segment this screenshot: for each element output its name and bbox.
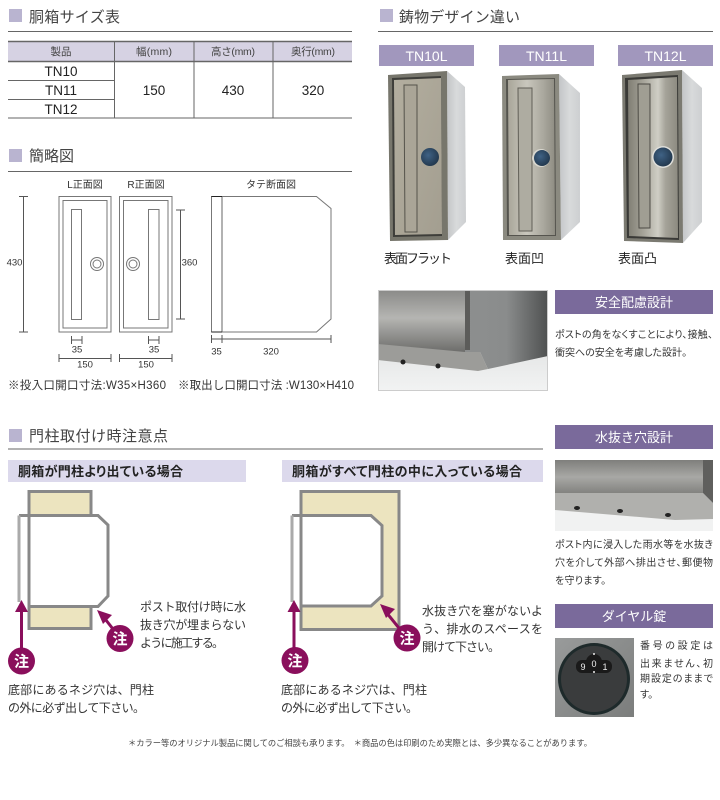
text: drain hole note: 抜き穴が埋まらない xyxy=(140,617,246,632)
size table: 320 xyxy=(302,83,324,98)
heading: schematic xyxy=(8,147,352,172)
text: dial lock description xyxy=(639,640,713,701)
banner: dial lock: ダイヤル錠 xyxy=(602,609,666,624)
text: drain space note: 水抜き穴を塞がないよ xyxy=(422,603,543,618)
dimension: 360 slot height: 360 xyxy=(182,258,197,268)
size table: 奥行(mm) xyxy=(291,45,335,58)
arrow: drain space: 注 xyxy=(399,630,415,648)
product: TN10L flat: 表面フラット xyxy=(384,251,452,266)
text: drain space note: う、排水のスペースを xyxy=(422,622,543,636)
size table xyxy=(8,41,352,118)
banner: drain hole design: 水抜き穴設計 xyxy=(595,430,673,445)
schematic: L front view xyxy=(59,179,111,370)
schematic: vertical section: 35 xyxy=(211,346,222,358)
text: screw hole note: の外に必ず出して下さい。 xyxy=(8,701,145,715)
banner: safety design xyxy=(555,290,713,314)
text: screw hole note xyxy=(281,683,427,715)
heading: schematic: 簡略図 xyxy=(29,147,74,165)
panel: box fully inside gatepost xyxy=(281,460,543,715)
product: TN11L concave: TN11L xyxy=(526,48,567,64)
text: drain description: ポスト内に浸入した雨水等を水抜き xyxy=(555,538,713,551)
photo: rounded corner xyxy=(378,290,548,391)
schematic: R front view xyxy=(120,179,172,370)
text: drain space note xyxy=(422,603,543,654)
arrow: drain space xyxy=(380,604,420,652)
dimension: 360 slot height xyxy=(176,210,197,319)
subheading xyxy=(282,460,543,482)
heading: casting design: 鋳物デザイン違い xyxy=(399,8,520,26)
product: TN12L convex xyxy=(618,45,713,266)
footer note: ＊カラー等のオリジナル製品に関してのご相談も承ります。 ＊商品の色は印刷のため実際とは、多少異なることがあります。 xyxy=(128,738,592,748)
diagram xyxy=(292,492,399,630)
text: safety description xyxy=(555,328,713,359)
size table: 高さ(mm) xyxy=(211,45,255,58)
text: drain space note: 開けて下さい。 xyxy=(422,640,500,654)
size table: 製品 xyxy=(50,45,72,58)
note: opening sizes xyxy=(8,378,354,392)
banner: drain hole design xyxy=(555,425,713,449)
banner: dial lock xyxy=(555,604,713,628)
arrow: drain holes xyxy=(97,610,134,652)
product: TN10L flat: TN10L xyxy=(405,48,448,64)
photo: dial lock: 0 xyxy=(591,659,597,669)
heading: gatepost mounting: 門柱取付け時注意点 xyxy=(29,428,168,445)
text: screw hole note xyxy=(8,683,154,715)
schematic: R front view: 150 xyxy=(138,360,154,370)
dimension: 430 height: 430 xyxy=(7,258,22,268)
arrow: screw holes xyxy=(8,600,35,674)
diagram xyxy=(19,492,108,628)
size table: 150 xyxy=(143,83,165,98)
size table: TN11 xyxy=(45,83,77,98)
text: dial lock description: 出来ません、初 xyxy=(640,657,713,670)
photo: dial lock: 1 xyxy=(602,662,608,672)
heading: size table xyxy=(8,9,352,32)
subheading xyxy=(8,460,246,482)
arrow: screw holes xyxy=(282,600,308,674)
photo: drain holes xyxy=(555,460,713,531)
heading: casting design xyxy=(378,8,713,32)
text: safety description: ポストの角をなくすことにより、接触、 xyxy=(555,328,713,341)
text: screw hole note: 底部にあるネジ穴は、門柱 xyxy=(281,683,427,697)
text: dial lock description: す。 xyxy=(639,689,653,701)
text: safety description: 衝突への安全を考慮した設計。 xyxy=(555,346,687,359)
text: drain hole note: ポスト取付け時に水 xyxy=(140,600,246,614)
text: screw hole note: 底部にあるネジ穴は、門柱 xyxy=(8,683,154,697)
size table: TN10 xyxy=(44,64,78,79)
text: dial lock description: 番号の設定は xyxy=(640,640,713,652)
product: TN11L concave xyxy=(499,45,594,266)
dimension: 430 height xyxy=(7,196,28,332)
banner: safety design: 安全配慮設計 xyxy=(595,295,673,310)
schematic: R front view: R正面図 xyxy=(127,179,165,191)
arrow: drain holes: 注 xyxy=(112,630,128,648)
schematic: L front view: 150 xyxy=(77,360,93,370)
photo: dial lock: 9 xyxy=(580,662,586,672)
size table: TN12 xyxy=(44,102,78,117)
schematic: vertical section xyxy=(211,179,331,358)
text: dial lock description: 期設定のままで xyxy=(640,673,713,685)
text: drain description: を守ります。 xyxy=(555,575,606,587)
note: opening sizes: ※取出し口開口寸法 :W130×H410 xyxy=(178,378,354,392)
subheading: 胴箱が門柱より出ている場合 xyxy=(18,464,183,479)
note: opening sizes: ※投入口開口寸法:W35×H360 xyxy=(8,378,166,392)
arrow: screw holes: 注 xyxy=(287,652,303,670)
product: TN12L convex: TN12L xyxy=(644,48,687,64)
size table: 幅(mm) xyxy=(136,45,172,58)
heading: gatepost mounting xyxy=(8,428,543,449)
product: TN11L concave: 表面凹 xyxy=(505,251,544,266)
photo: dial lock xyxy=(555,638,634,717)
schematic: L front view: 35 xyxy=(72,344,82,356)
schematic: vertical section: タテ断面図 xyxy=(246,179,296,191)
text: screw hole note: の外に必ず出して下さい。 xyxy=(281,701,418,715)
heading: size table: 胴箱サイズ表 xyxy=(29,9,120,26)
text: drain hole note: ように施工する。 xyxy=(140,636,224,650)
subheading: 胴箱がすべて門柱の中に入っている場合 xyxy=(292,464,522,479)
size table: 430 xyxy=(222,83,244,98)
schematic: R front view: 35 xyxy=(149,344,159,356)
panel: box protrudes from gatepost xyxy=(8,460,246,715)
arrow: screw holes: 注 xyxy=(14,652,29,670)
product: TN12L convex: 表面凸 xyxy=(618,251,657,266)
text: drain description: 穴を介して外部へ排出させ、郵便物 xyxy=(555,556,713,569)
text: drain hole note xyxy=(140,600,246,650)
schematic: L front view: L正面図 xyxy=(67,179,103,191)
schematic: vertical section: 320 xyxy=(263,346,279,358)
text: drain description xyxy=(555,538,713,587)
product: TN10L flat xyxy=(379,45,474,266)
